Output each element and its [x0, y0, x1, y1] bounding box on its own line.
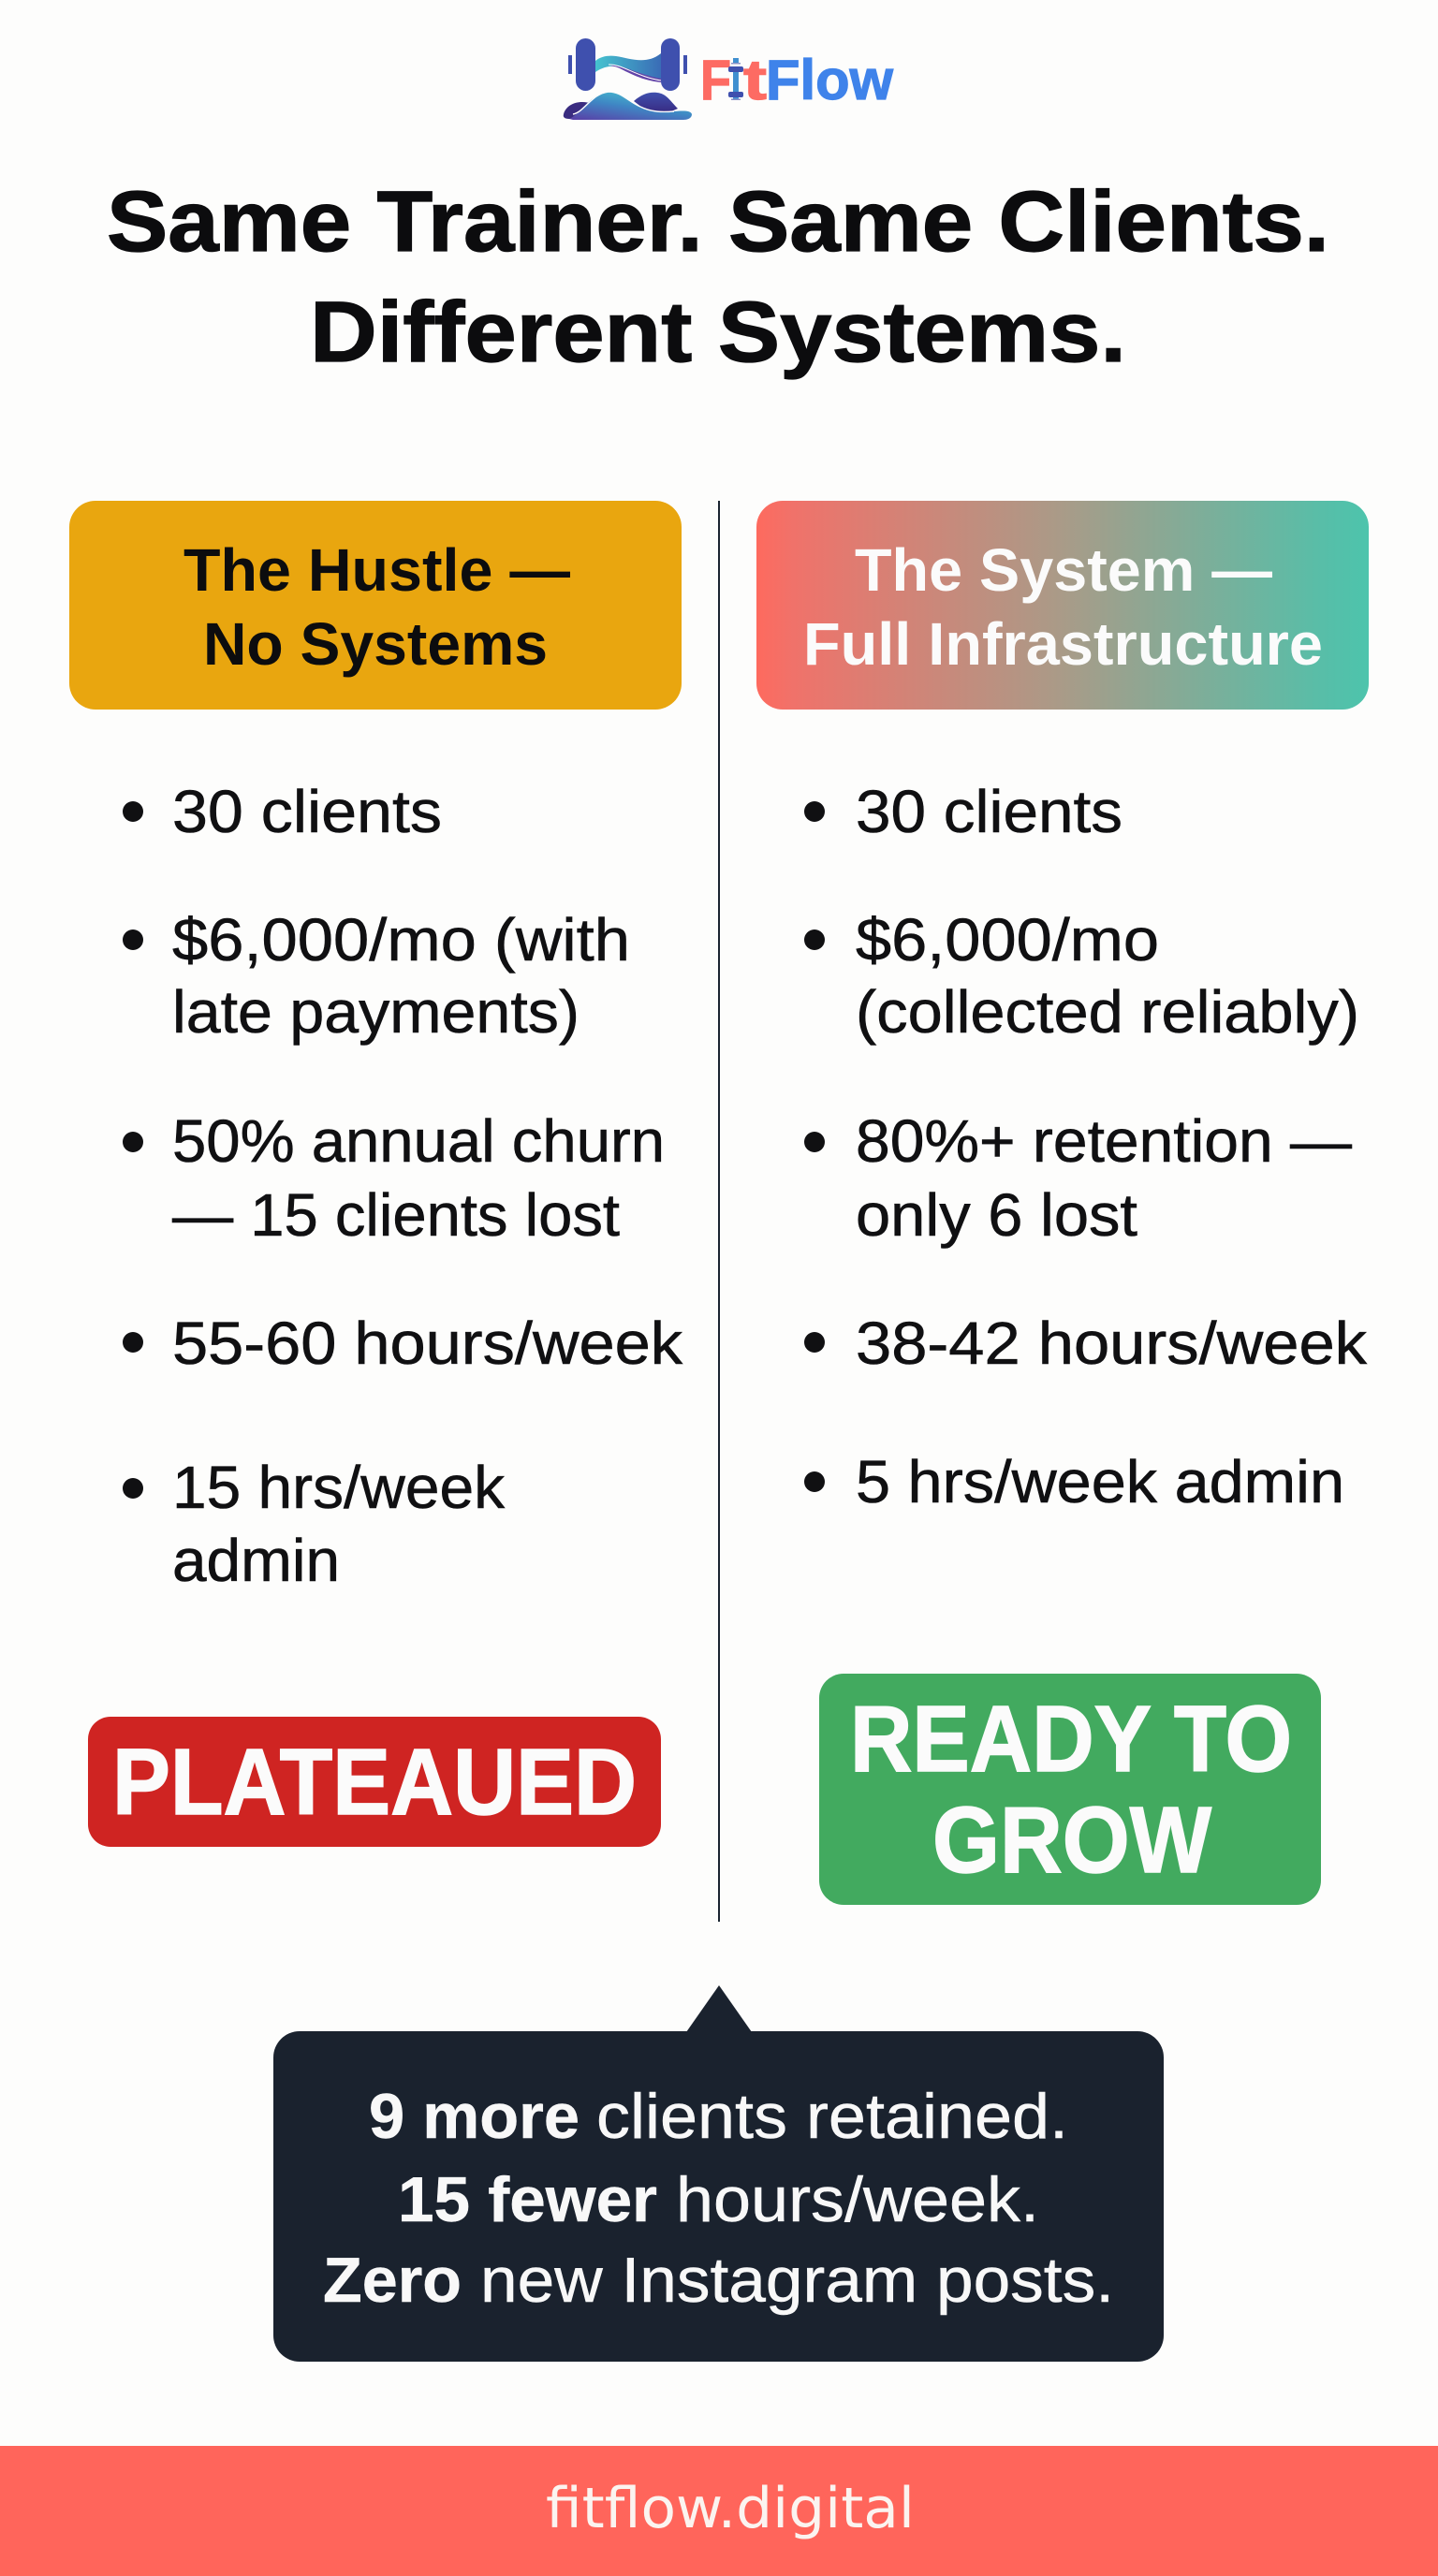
- callout: summary: 9 more: [369, 2081, 580, 2152]
- badge: READY TO GROW: [819, 1674, 1321, 1905]
- bullet list: hustle stats: 30 clients: [172, 778, 442, 845]
- bullet list: system stats: $6,000/mo: [856, 906, 1159, 973]
- title: [107, 174, 1329, 380]
- panel: The System column: [756, 501, 1369, 1905]
- callout: summary: hours/week.: [676, 2164, 1039, 2235]
- bullet list: hustle stats: 50% annual churn: [172, 1107, 665, 1175]
- callout pointer arrow: [686, 1985, 752, 2032]
- heading: The System: Full Infrastructure: [803, 610, 1323, 678]
- bullet list: hustle stats: [123, 778, 683, 1594]
- title: Same Trainer. Same Clients.: [107, 174, 1329, 270]
- bullet list: hustle stats: admin: [172, 1527, 340, 1594]
- badge: READY TO GROW: GROW: [932, 1788, 1212, 1893]
- heading: The Hustle: The Hustle —: [183, 536, 570, 604]
- bullet list: hustle stats: — 15 clients lost: [172, 1181, 620, 1249]
- bullet list: system stats: 38-42 hours/week: [856, 1310, 1368, 1377]
- footer bar: fitflow.digital: [546, 2476, 915, 2541]
- bullet list: hustle stats: 15 hrs/week: [172, 1454, 506, 1521]
- icon: dumbbell with waves: [564, 38, 692, 120]
- badge: PLATEAUED: PLATEAUED: [112, 1730, 637, 1835]
- bullet list: system stats: only 6 lost: [856, 1181, 1137, 1249]
- heading: The Hustle: [69, 501, 682, 710]
- bullet list: system stats: 30 clients: [856, 778, 1123, 845]
- divider between columns: [718, 501, 720, 1922]
- callout: summary: new Instagram posts.: [480, 2245, 1114, 2316]
- bullet list: system stats: (collected reliably): [856, 978, 1359, 1046]
- panel: The Hustle column: [69, 501, 683, 1847]
- heading: The System: [756, 501, 1369, 710]
- bullet list: system stats: 5 hrs/week admin: [856, 1448, 1344, 1515]
- wordmark: Flow: [766, 49, 893, 111]
- callout: summary: clients retained.: [596, 2081, 1068, 2152]
- bullet list: hustle stats: $6,000/mo (with: [172, 906, 630, 973]
- logo: FitFlow: [564, 38, 893, 120]
- bullet list: hustle stats: 55-60 hours/week: [172, 1310, 683, 1377]
- footer bar: [0, 2446, 1438, 2576]
- heading: The Hustle: No Systems: [203, 610, 548, 678]
- bullet list: system stats: [804, 778, 1368, 1515]
- title: Different Systems.: [310, 285, 1126, 380]
- bullet list: hustle stats: late payments): [172, 978, 580, 1046]
- callout: summary: 15 fewer: [398, 2164, 657, 2235]
- wordmark: i: [730, 49, 741, 111]
- callout: summary: Zero: [323, 2245, 462, 2316]
- callout: summary: [273, 1985, 1164, 2362]
- bullet list: system stats: 80%+ retention —: [856, 1107, 1352, 1175]
- badge: READY TO GROW: READY TO: [850, 1687, 1292, 1792]
- wordmark: F: [700, 49, 731, 111]
- wordmark: [700, 49, 893, 111]
- heading: The System: The System —: [855, 536, 1272, 604]
- wordmark: t: [743, 49, 767, 111]
